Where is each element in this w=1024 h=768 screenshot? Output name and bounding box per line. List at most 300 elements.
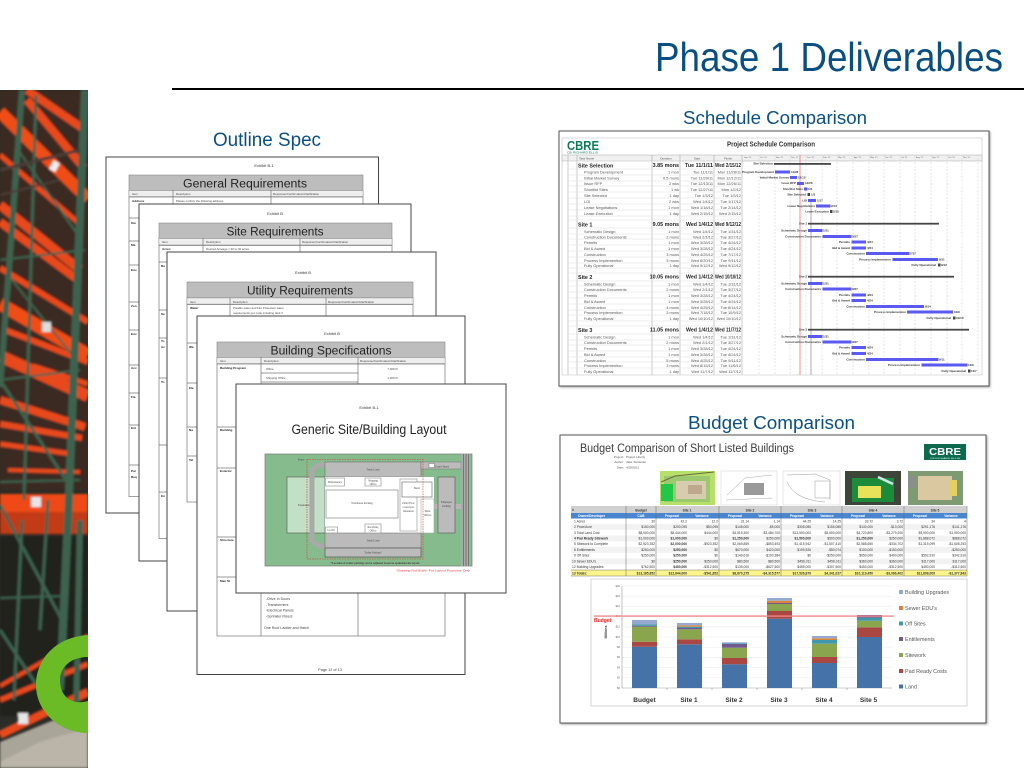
budget table: $450,000 (921, 565, 935, 569)
CBRE logo (924, 444, 966, 460)
budget table: $140,000 (859, 525, 873, 529)
page: general requirements: Par (131, 469, 137, 473)
site thumbnails (660, 471, 963, 505)
gantt timeline header: Nov '11 (776, 157, 784, 159)
page: building specifications: Exhibit B (324, 331, 340, 336)
gantt timeline header: Jun '12 (885, 157, 893, 159)
page: site requirements: To (161, 380, 165, 384)
budget table: -$100,384 (765, 554, 780, 558)
task table rows: Tue 1/31/12 (720, 229, 741, 234)
task table rows: Wed 9/12/12 (719, 263, 741, 268)
budget table: -$334,702 (888, 542, 903, 546)
budget table: $4,515,300 (732, 531, 749, 535)
task table rows: Construction (584, 252, 606, 257)
site plan drawing: Retention (403, 510, 414, 513)
task table rows: Lease Execution (584, 211, 613, 216)
budget table: $199,926 (797, 548, 811, 552)
gantt chart bars: Permits (839, 293, 850, 297)
task table rows: 9.05 mons (653, 222, 679, 228)
budget table: $150,000 (641, 525, 655, 529)
panel: project schedule comparison gantt (559, 131, 989, 386)
task table rows: Fully Operational (584, 316, 614, 321)
task table rows: 1 mon (668, 170, 679, 174)
budget table: $1,250,000 (856, 536, 873, 540)
task table rows: 2 wks (669, 181, 679, 186)
gantt chart bars: 2/14 (831, 204, 837, 208)
page: general requirements: Ow (131, 221, 136, 225)
task table rows: Tue 1/31/12 (720, 334, 741, 340)
gantt chart bars: Site Selection (753, 162, 773, 166)
table grid (562, 155, 982, 375)
task table rows: Permits (584, 346, 597, 351)
page: general requirements: Ent (131, 426, 136, 430)
task table rows: 3 mons (666, 258, 679, 263)
CBRE logo: CB RICHARD ELLIS (930, 457, 961, 460)
page: building specifications: -Drive In Doors (266, 597, 290, 601)
budget table: $360,000 (859, 560, 873, 564)
budget table: $670,000 (735, 548, 749, 552)
page: utility requirements: Ele (189, 386, 194, 390)
page: site requirements: Acres (162, 247, 171, 251)
stacked bar chart (591, 579, 967, 706)
category labels: Site 1 (680, 697, 698, 704)
task table rows: Wed 1/4/12 (686, 328, 713, 334)
task table rows: Tue 11/29/11 (691, 176, 713, 180)
gantt chart bars: Lease Negotiations (787, 204, 815, 208)
budget table: -$541,852 (703, 572, 718, 576)
bar: site 4 (812, 636, 837, 688)
task table rows: Wed 3/28/12 (691, 346, 713, 351)
task table rows: Tue 11/1/11 (693, 170, 713, 174)
site plan drawing: *Location of trailer parking can be adjusted based on optimized site layout (330, 562, 420, 565)
gantt chart bars: 4/24 (867, 240, 873, 244)
gantt chart bars: LOI (802, 198, 807, 202)
budget table: -$312,500 (951, 565, 966, 569)
task table rows: Wed 3/28/12 (691, 240, 713, 245)
site plan drawing: Pallet Flow (402, 502, 415, 505)
budget table: 42.2 (681, 520, 687, 524)
budget table: $250,000 (766, 536, 780, 540)
budget table: # (572, 508, 574, 512)
task table rows: Initial Market Survey (584, 176, 619, 180)
category labels (633, 697, 878, 704)
gantt chart bars: Lease Execution (805, 210, 829, 214)
task table rows: Tue 4/24/12 (720, 240, 741, 245)
budget table: -$250,000 (951, 548, 966, 552)
budget table: -$1,377,843 (948, 572, 966, 576)
page: utility requirements (167, 252, 436, 611)
gantt chart bars: Initial Market Survey (760, 176, 789, 180)
budget table: -$312,500 (703, 565, 718, 569)
task table rows: Bid & Award (584, 352, 605, 357)
budget table: -$3,066,402 (885, 572, 903, 576)
task table rows: Tue 3/27/12 (720, 287, 741, 292)
project meta: Author: (614, 460, 624, 464)
budget table: $250,000 (641, 548, 655, 552)
task table rows: 11.05 mons (650, 328, 679, 334)
gantt timeline header (744, 156, 971, 159)
budget table: $0 (714, 554, 718, 558)
task table rows: Wed 9/12/12 (691, 263, 713, 268)
gantt chart bars: 9/11 (939, 358, 945, 362)
budget table: $149,616 (735, 554, 749, 558)
stacked bar chart: $0 (617, 686, 621, 690)
budget table: -$5,000 (769, 525, 780, 529)
task table rows: 1 mon (668, 229, 679, 234)
page: general requirements: Address (132, 199, 145, 203)
gantt chart bars: 1/31 (823, 282, 829, 286)
task table rows: Tue 3/27/12 (720, 234, 741, 240)
gantt timeline header: Nov '12 (963, 157, 971, 159)
panel: outline spec stacked document pages (106, 157, 506, 674)
budget table (571, 506, 967, 576)
task table rows: Wed 4/25/12 (691, 358, 713, 363)
budget table: $0 (807, 554, 811, 558)
gantt chart bars: 4/24 (867, 352, 873, 356)
project meta: Jake Terkanian (626, 460, 646, 464)
page: building specifications: Item (220, 359, 226, 363)
site plan drawing: Office (370, 530, 377, 532)
task table rows: Tue 4/24/12 (720, 293, 741, 298)
budget table: $250,000 (704, 560, 718, 564)
budget table: $80,500 (737, 560, 749, 564)
site plan drawing: Trailer Parking* (364, 552, 382, 554)
budget table: Proposal (790, 514, 804, 518)
gantt chart bars: 4/24 (867, 298, 873, 302)
gantt chart bars: Construction Documents (785, 287, 821, 291)
gantt chart bars: Site 1 (799, 222, 807, 226)
gantt chart bars: 7/17 (910, 252, 916, 256)
page: general requirements: Env (131, 332, 137, 336)
budget table: -$923,352 (703, 542, 718, 546)
gantt chart bars: Process Implemention (859, 258, 891, 262)
gantt chart bars: 1/3 (811, 192, 816, 196)
page: general requirements (106, 157, 378, 513)
site plan drawing: Receiving (368, 526, 379, 529)
task table rows: Wed 11/7/12 (719, 369, 741, 374)
task table rows: Site Selection (578, 164, 613, 170)
task table rows: Wed 10/10/12 (689, 316, 713, 321)
task table rows: Wed 2/1/12 (693, 234, 713, 240)
budget table: Site 4 (869, 508, 878, 512)
gantt chart bars: Fully Operational (941, 369, 966, 373)
page: utility requirements: Na (189, 428, 193, 432)
budget table: $1,315,099 (918, 542, 935, 546)
bar: budget (632, 620, 657, 688)
task table rows: Tue 2/14/12 (720, 205, 741, 210)
budget table: -$1,507,410 (823, 542, 841, 546)
task table rows: Tue 1/17/12 (720, 199, 741, 204)
page: generic site/building layout: Generic Site/Building Layout (292, 422, 447, 437)
budget table: -$50,074 (828, 548, 841, 552)
task table rows: Wed 2/15/12 (715, 163, 741, 169)
budget table: $2,923,352 (638, 542, 655, 546)
task table rows: Wed 9/12/12 (715, 222, 741, 228)
task table rows: 1 day (669, 211, 679, 216)
gantt chart bars: Bid & Award (832, 298, 850, 302)
task table rows: Schematic Design (584, 334, 615, 340)
task table rows: Tue 1/31/12 (720, 282, 741, 286)
page: site requirements: Response/Confirmation/Clarification (302, 240, 349, 244)
gantt chart bars: Process Implemention (874, 310, 906, 314)
budget table: $1,415,942 (794, 542, 811, 546)
gantt title: Project Schedule Comparison (727, 142, 815, 148)
budget table: $13,185,852 (637, 572, 655, 576)
page: building specifications: 1,000 ft² (387, 376, 398, 380)
task table rows: 1 mon (668, 282, 679, 286)
task table rows: Wed 3/28/12 (691, 293, 713, 298)
project meta: 4/28/2011 (626, 466, 639, 470)
site plan drawing: Guard Shack (435, 466, 450, 468)
task table rows: Tue 1/3/12 (695, 193, 713, 198)
task table rows: 2 mons (666, 340, 679, 345)
task table rows: 1 mon (668, 346, 679, 351)
stacked bar chart: Millions (604, 625, 608, 639)
panel: budget comparison (560, 435, 986, 723)
task table rows: 1 mon (668, 246, 679, 251)
gantt chart bars: 1/31 (823, 228, 829, 232)
budget table: $13,500,000 (793, 531, 811, 535)
budget table: $291,176 (921, 525, 935, 529)
page: site requirements: To (161, 339, 165, 343)
budget table: $155,085 (827, 525, 841, 529)
task table rows: Wed 8/15/12 (691, 363, 713, 368)
budget table: Site 5 (931, 508, 940, 512)
task table rows: Tue 11/6/12 (721, 363, 741, 368)
page: utility requirements: Item (190, 300, 196, 304)
stacked bar chart: $10 (616, 635, 621, 639)
site plan drawing: Co-Oil (327, 529, 335, 532)
gantt chart bars: Construction (846, 252, 865, 256)
task table rows: Process Implemention (584, 363, 622, 368)
budget table: $2,069,859 (732, 542, 749, 546)
budget table: $11,808,009 (917, 572, 935, 576)
budget table: $400,000 (889, 554, 903, 558)
gantt chart bars: Issue RFP (781, 181, 796, 185)
stacked bar chart: $16 (616, 604, 621, 608)
task table rows: 1 day (669, 263, 679, 268)
page: building specifications: Building (220, 428, 232, 432)
task table rows: Fully Operational (584, 263, 614, 268)
budget table: 12.2 (712, 520, 718, 524)
task table rows: Tue 12/27/11 (690, 187, 713, 192)
task table rows: Bid & Award (584, 246, 605, 251)
budget table: $456,011 (797, 560, 811, 564)
budget table: CAB (637, 514, 645, 518)
task table rows: Mon 1/2/12 (722, 187, 741, 192)
gantt chart bars: 11/7 (971, 369, 977, 373)
table grid: Task Name (579, 156, 594, 160)
gantt chart bars: 3/27 (852, 234, 858, 238)
site plan drawing: Main (425, 510, 431, 513)
gantt chart bars: Bid & Award (832, 246, 850, 250)
budget table: $8,444,000 (670, 531, 687, 535)
budget table: $250,000 (673, 548, 687, 552)
task table rows: Site 1 (578, 222, 592, 228)
budget table: $450,000 (673, 565, 687, 569)
gantt chart bars: Construction Documents (785, 340, 821, 344)
task table rows: Wed 3/28/12 (691, 299, 713, 304)
page: general requirements: Env (131, 268, 137, 272)
budget table: $200,095 (673, 525, 687, 529)
task table rows: 0.5 mons (663, 176, 679, 180)
task table rows: Wed 7/18/12 (691, 310, 713, 315)
gantt timeline header: Dec '11 (791, 157, 799, 159)
budget table: $0 (714, 548, 718, 552)
task table rows: 1 day (669, 316, 679, 321)
page: building specifications: Shipping Office (266, 376, 286, 380)
page: site requirements: Item (162, 240, 168, 244)
gantt timeline header: Mar '12 (838, 156, 846, 159)
stacked bar chart: $12 (616, 624, 621, 628)
task table rows: Tue 11/1/11 (685, 163, 713, 169)
budget table: $12,644,000 (669, 572, 687, 576)
budget table: $888,072 (952, 536, 966, 540)
budget table: $762,500 (641, 565, 655, 569)
budget table: $360,000 (889, 560, 903, 564)
budget table: $500,000 (827, 536, 841, 540)
budget table: $9,900,000 (918, 531, 935, 535)
table grid: Start (694, 156, 700, 160)
page: utility requirements: Exhibit B (295, 270, 311, 275)
stacked bar chart: $20 (616, 584, 621, 588)
page: site requirements: Desired Acreage = 30 to 40 acres (206, 247, 250, 251)
task table rows: 1 mon (668, 299, 679, 304)
budget table: Site 2 (746, 508, 755, 512)
gantt chart bars: Process Implemention (888, 363, 920, 367)
gantt chart bars: 10/10 (956, 316, 964, 320)
budget table: 12 Building Upgrades (572, 565, 604, 569)
budget table: Variance (944, 514, 958, 518)
gantt chart bars: Permits (839, 346, 850, 350)
budget table: $2,588,650 (856, 542, 873, 546)
legend: Entitlements (905, 637, 935, 643)
task table rows: Wed 6/20/12 (691, 258, 713, 263)
legend: Off Sites (905, 622, 926, 628)
gantt chart bars: Schematic Design (781, 228, 807, 232)
task table rows: Wed 2/15/12 (691, 211, 713, 216)
budget table: $1,250,000 (732, 536, 749, 540)
budget table: 14.25 (833, 520, 841, 524)
budget table: $2,000,000 (670, 542, 687, 546)
task table rows: Tue 10/9/12 (720, 310, 741, 315)
budget table: $250,000 (889, 536, 903, 540)
task table rows: Process Implemention (584, 310, 622, 315)
budget line label: Budget (594, 618, 612, 624)
page: site requirements (139, 204, 411, 561)
budget table: $10,119,450 (855, 572, 873, 576)
legend: Building Upgrades (905, 590, 949, 596)
heading: outline spec: Outline Spec (213, 129, 321, 151)
site plan drawing: Office (370, 483, 377, 486)
task table rows: Tue 4/24/12 (720, 246, 741, 251)
budget table: $80,500 (768, 560, 780, 564)
page: site requirements: En (161, 494, 165, 498)
page: general requirements: Response/Confirmation/Clarification (273, 192, 320, 196)
task table rows: Construction (584, 305, 606, 310)
task table rows: Site 2 (578, 275, 592, 281)
budget table: 44.25 (803, 520, 811, 524)
page: building specifications: Building Program (220, 366, 246, 370)
gantt chart bars: Shortlist Sites (783, 187, 803, 191)
legend: Pad Ready Costs (905, 669, 947, 675)
budget table: $250,000 (673, 560, 687, 564)
budget table: $0 (651, 560, 655, 564)
budget table: $5,500,000 (824, 531, 841, 535)
page: site requirements: Description (206, 240, 221, 244)
budget table: -$3,279,200 (885, 531, 903, 535)
site plan drawing: *Drawing Not Scale. For Layout Purposes Only (396, 568, 471, 572)
site plan drawing: Maintenance (328, 481, 343, 484)
budget table: $1,500,000 (794, 536, 811, 540)
CBRE logo: CBRE (929, 447, 961, 458)
task table rows: Tue 9/11/12 (721, 258, 741, 263)
budget table: Variance (758, 514, 772, 518)
gantt chart bars: 12/12 (798, 176, 806, 180)
task table rows: 1 mon (668, 293, 679, 298)
heading: schedule comparison: Schedule Comparison (683, 108, 867, 128)
page: utility requirements: Wa (189, 345, 194, 349)
task table rows: Process Implemention (584, 258, 622, 263)
gantt chart bars: Fully Operational (911, 263, 936, 267)
gantt chart bars: 9/11 (939, 258, 945, 262)
task table rows: Mon 12/26/11 (717, 181, 741, 186)
gantt chart bars: Site Selected (787, 192, 806, 196)
gantt timeline header: May '12 (870, 157, 878, 159)
site plan drawing: Shipping (368, 480, 379, 482)
category labels: Site 2 (725, 697, 743, 704)
budget table: $117,000 (952, 560, 966, 564)
project meta: Date: (617, 466, 624, 470)
site plan drawing: Parking (442, 505, 451, 508)
task table rows: Construction (584, 358, 606, 363)
task table rows: Mon 12/12/11 (717, 176, 741, 180)
budget table: -$10,000 (890, 525, 903, 529)
gantt chart bars: 11/28 (791, 170, 799, 174)
budget table: $4,720,800 (856, 531, 873, 535)
gantt chart bars: 10/9 (954, 310, 960, 314)
site plan drawing (265, 454, 472, 572)
task table rows: 3 mons (666, 310, 679, 315)
task table rows (578, 163, 741, 374)
title rule (172, 88, 1024, 90)
page: site requirements: Ac (161, 345, 165, 349)
task table rows: Schematic Design (584, 282, 615, 286)
gantt timeline header: Apr '12 (854, 156, 862, 159)
task table rows: 1 mon (668, 240, 679, 245)
task table rows: Wed 1/4/12 (686, 222, 713, 228)
budget table: 9 Off Sites (574, 554, 590, 558)
page: general requirements: Description (176, 192, 191, 196)
budget table: $650,000 (859, 554, 873, 558)
gantt timeline header: Jan '12 (807, 157, 815, 159)
legend: Land (905, 684, 917, 690)
budget table: $145,000 (735, 525, 749, 529)
budget table: -$312,500 (888, 565, 903, 569)
task table rows: Site Selected (584, 193, 607, 198)
task table rows: Tue 4/24/12 (720, 352, 741, 357)
task table rows: 1 mon (668, 352, 679, 357)
budget table: $444,000 (704, 531, 718, 535)
gantt chart bars: 12/26 (805, 181, 813, 185)
bar: site 5 (857, 615, 882, 688)
budget table: 3.72 (897, 520, 903, 524)
task table rows: 2 wks (669, 199, 679, 204)
task table rows: Bid & Award (584, 299, 605, 304)
budget table: $141,176 (952, 525, 966, 529)
task table rows: Wed 1/4/12 (686, 274, 713, 280)
task table rows: 2 mons (666, 287, 679, 292)
